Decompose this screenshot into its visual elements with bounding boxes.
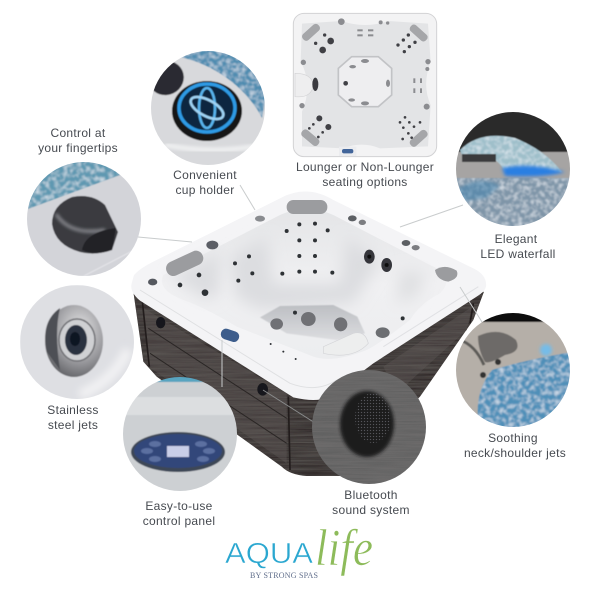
- circle: neck jets: [455, 312, 572, 430]
- top view of tub: [293, 13, 437, 157]
- label: cup holder: Convenient: [173, 168, 237, 182]
- label: control: your fingertips: [38, 141, 118, 155]
- label: lounger seating: seating options: [322, 175, 408, 189]
- label: LED waterfall: [480, 232, 556, 261]
- tub cabinet: [133, 292, 484, 476]
- label: cup holder: [173, 168, 237, 197]
- circle: control at fingertips: [25, 160, 142, 278]
- label: stainless jets: steel jets: [48, 418, 98, 432]
- label: control panel: [143, 499, 215, 528]
- label: cup holder: cup holder: [175, 183, 235, 197]
- circle: cup holder: [151, 51, 265, 165]
- leader lines: [138, 185, 482, 428]
- logo: AquaLife by Strong Spas: BY STRONG SPAS: [250, 571, 318, 580]
- jets: [178, 222, 405, 360]
- headrests: [164, 200, 457, 282]
- label: LED waterfall: LED waterfall: [480, 247, 556, 261]
- main hot tub: [131, 192, 486, 476]
- label: neck jets: [464, 431, 566, 460]
- label: control: Control at: [50, 126, 106, 140]
- label: bluetooth: [332, 488, 410, 517]
- circle: bluetooth speaker: [311, 369, 427, 485]
- label: control panel: control panel: [143, 514, 215, 528]
- footwell: [260, 305, 368, 355]
- label: bluetooth: sound system: [332, 503, 410, 517]
- logo: AquaLife by Strong Spas: [225, 520, 373, 580]
- label: LED waterfall: Elegant: [495, 232, 538, 246]
- acrylic shell: [131, 192, 486, 400]
- label: neck jets: neck/shoulder jets: [464, 446, 566, 460]
- label: bluetooth: Bluetooth: [344, 488, 398, 502]
- label: stainless jets: [47, 403, 99, 432]
- label: control: [38, 126, 118, 155]
- label: control panel: Easy-to-use: [145, 499, 213, 513]
- label: stainless jets: Stainless: [47, 403, 99, 417]
- tub interior bowl: [162, 209, 446, 359]
- label: lounger seating: [296, 160, 434, 189]
- circle: stainless steel jet: [20, 285, 135, 400]
- label: neck jets: Soothing: [488, 431, 538, 445]
- circle: LED waterfall: [455, 111, 572, 230]
- logo: AquaLife by Strong Spas: life: [315, 520, 373, 577]
- rim controls: [148, 215, 420, 396]
- label: lounger seating: Lounger or Non-Lounger: [296, 160, 434, 174]
- circle: control panel: [122, 376, 238, 492]
- logo: AquaLife by Strong Spas: AQUA: [225, 538, 314, 570]
